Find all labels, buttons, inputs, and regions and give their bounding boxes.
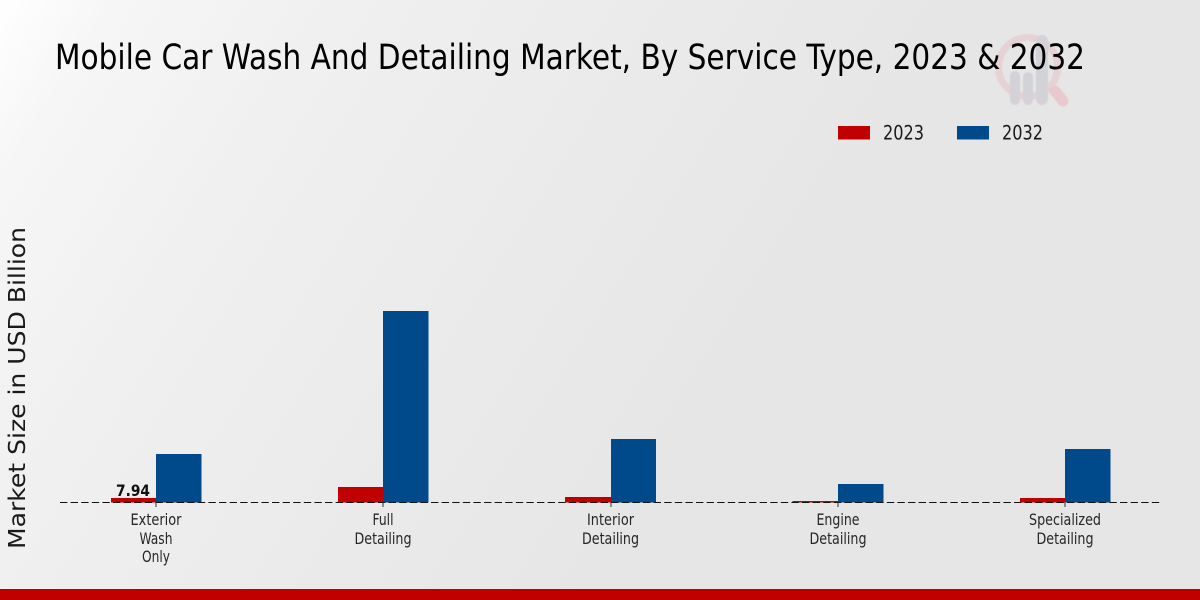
category label: Engine Detailing [810,510,866,548]
legend: 2032 [957,121,1043,144]
legend [838,121,1043,144]
category label: Specialized Detailing: Detailing [1036,529,1094,548]
group: Full Detailing [338,311,428,502]
legend: 2023 [838,121,924,144]
category label: Specialized Detailing [1029,510,1101,548]
group: Interior Detailing [565,439,656,502]
data label: 7.94: 7.94 [116,481,150,500]
icon: watermark logo [998,38,1063,101]
bar chart [111,311,1110,502]
category label: Exterior Wash Only: Only [142,547,170,566]
group: Specialized Detailing [1020,449,1110,502]
category label: Engine Detailing: Detailing [810,529,866,548]
category label: Interior Detailing: Interior [587,510,634,529]
x axis baseline [60,502,1160,507]
legend: 2032: 2032 [1002,121,1043,144]
category label: Engine Detailing: Engine [816,510,860,529]
group: Exterior Wash Only [111,454,202,502]
category label: Interior Detailing: Detailing [582,529,639,548]
group: Engine Detailing [792,484,884,502]
y axis label: Market Size in USD Billion [5,227,31,549]
category label: Interior Detailing [582,510,639,548]
title: Mobile Car Wash And Detailing Market, By Service Type, 2023 & 2032 [55,38,1085,78]
category label: Full Detailing: Full [372,510,394,529]
footer bar [0,589,1200,600]
category label: Exterior Wash Only: Wash [140,529,172,548]
category label: Full Detailing [354,510,412,548]
category label: Exterior Wash Only [130,510,182,566]
category label: Full Detailing: Detailing [354,529,412,548]
category label: Exterior Wash Only: Exterior [130,510,182,529]
category label: Specialized Detailing: Specialized [1029,510,1101,529]
legend: 2023: 2023 [883,121,924,144]
